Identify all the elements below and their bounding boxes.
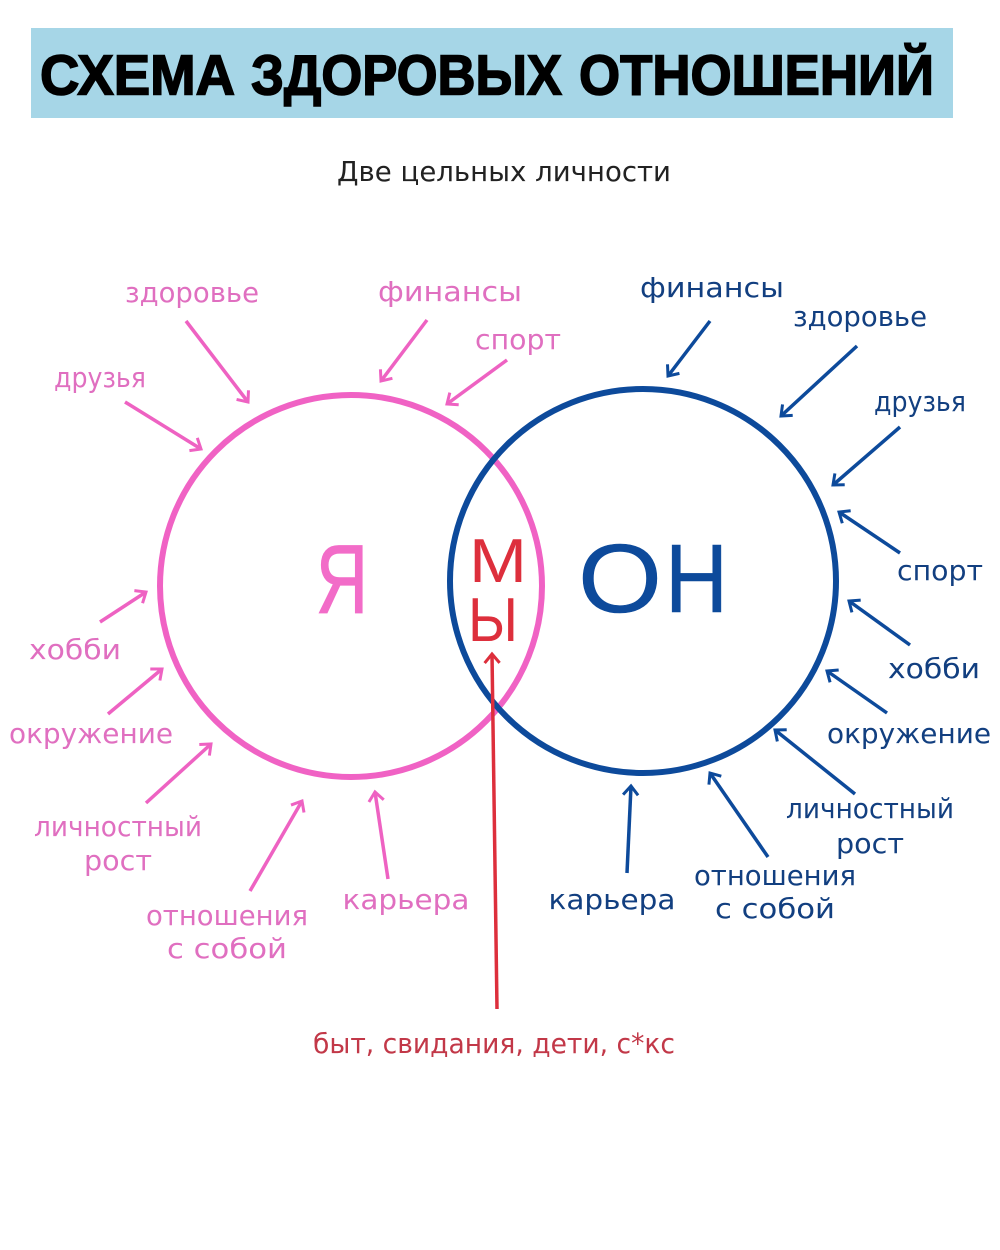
circle: ОН [450,389,836,773]
label: Я: Я [316,525,368,634]
subtitle: Две цельных личности [337,155,671,188]
circle: Я [160,395,542,777]
label: ОН: О [578,524,662,633]
blue arrows [627,321,910,873]
blue labels: ОН: рост [836,827,904,860]
title banner: СХЕМА [40,44,235,108]
blue labels: ОН: с собой [715,892,835,925]
pink arrows [100,320,507,891]
title banner: ЗДОРОВЫХ [251,44,562,108]
pink labels: Я: с собой [167,932,287,965]
blue labels: ОН: окружение [827,717,991,750]
red arrow [492,654,497,1009]
pink labels: Я [9,275,561,965]
title banner [31,28,953,118]
blue labels: ОН: здоровье [793,300,927,333]
pink labels: Я: друзья [54,361,146,394]
pink labels: Я: спорт [475,323,561,356]
blue labels: ОН: личностный [786,792,954,825]
blue labels: ОН: отношения [694,859,856,892]
pink labels: Я: здоровье [125,276,259,309]
label: ОН [578,524,728,633]
pink labels: Я: отношения [146,899,308,932]
label: МЫ: М [469,527,527,596]
shared life caption: быт, свидания, дети, с*кс [313,1027,675,1060]
pink labels: Я: рост [84,844,152,877]
blue labels: ОН: карьера [548,883,676,916]
label: ОН: Н [665,524,728,633]
pink labels: Я: окружение [9,717,173,750]
pink labels: Я: финансы [378,275,522,308]
blue labels: ОН: спорт [897,554,983,587]
blue labels: ОН: хобби [888,652,980,685]
label: МЫ [468,527,527,655]
pink labels: Я: личностный [34,810,202,843]
blue labels: ОН: финансы [640,271,784,304]
title banner: ОТНОШЕНИЙ [579,42,934,108]
blue labels: ОН: друзья [874,385,966,418]
blue labels: ОН [548,271,991,925]
pink labels: Я: карьера [342,883,470,916]
label: МЫ: Ы [468,586,518,655]
pink labels: Я: хобби [29,633,121,666]
